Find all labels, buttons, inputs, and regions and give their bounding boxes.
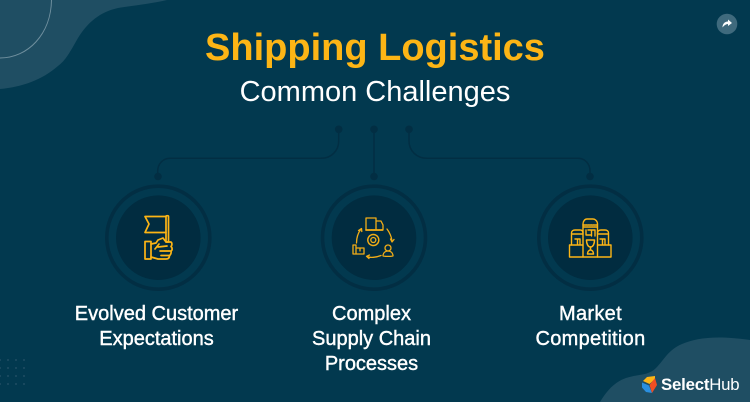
label: market competition: Market	[559, 302, 622, 324]
subtitle: Common Challenges	[240, 76, 510, 108]
label: market competition	[535, 302, 646, 350]
connector: left branch	[154, 126, 343, 180]
selecthub logo mark	[642, 376, 657, 393]
icon badge: evolved customer expectations	[107, 186, 210, 289]
bottom-right decorative blob	[600, 337, 750, 402]
top-left arc line	[0, 0, 52, 58]
label: complex supply chain processes: Supply Chain	[312, 328, 431, 350]
dot grid	[0, 359, 25, 385]
label: evolved customer expectations: Expectations	[99, 328, 214, 350]
icon: logistics cycle	[353, 218, 394, 258]
label: complex supply chain processes: Processes	[325, 352, 418, 374]
icon: winner podium with trophy	[570, 219, 611, 257]
label: evolved customer expectations	[75, 302, 238, 350]
connector: center branch	[370, 126, 378, 180]
icon badge: market competition	[539, 186, 642, 289]
top-left decorative blob	[0, 0, 167, 89]
label: evolved customer expectations: Evolved Customer	[75, 302, 238, 324]
selecthub logo text: SelectHub	[661, 375, 739, 394]
label: complex supply chain processes	[312, 302, 431, 374]
icon badge: complex supply chain processes	[322, 186, 426, 289]
label: market competition: Competition	[535, 328, 646, 350]
share button	[717, 14, 737, 34]
label: complex supply chain processes: Complex	[332, 302, 411, 324]
connector: right branch	[405, 126, 594, 180]
icon: hand holding flag	[145, 216, 172, 259]
title: Shipping Logistics	[205, 26, 545, 68]
